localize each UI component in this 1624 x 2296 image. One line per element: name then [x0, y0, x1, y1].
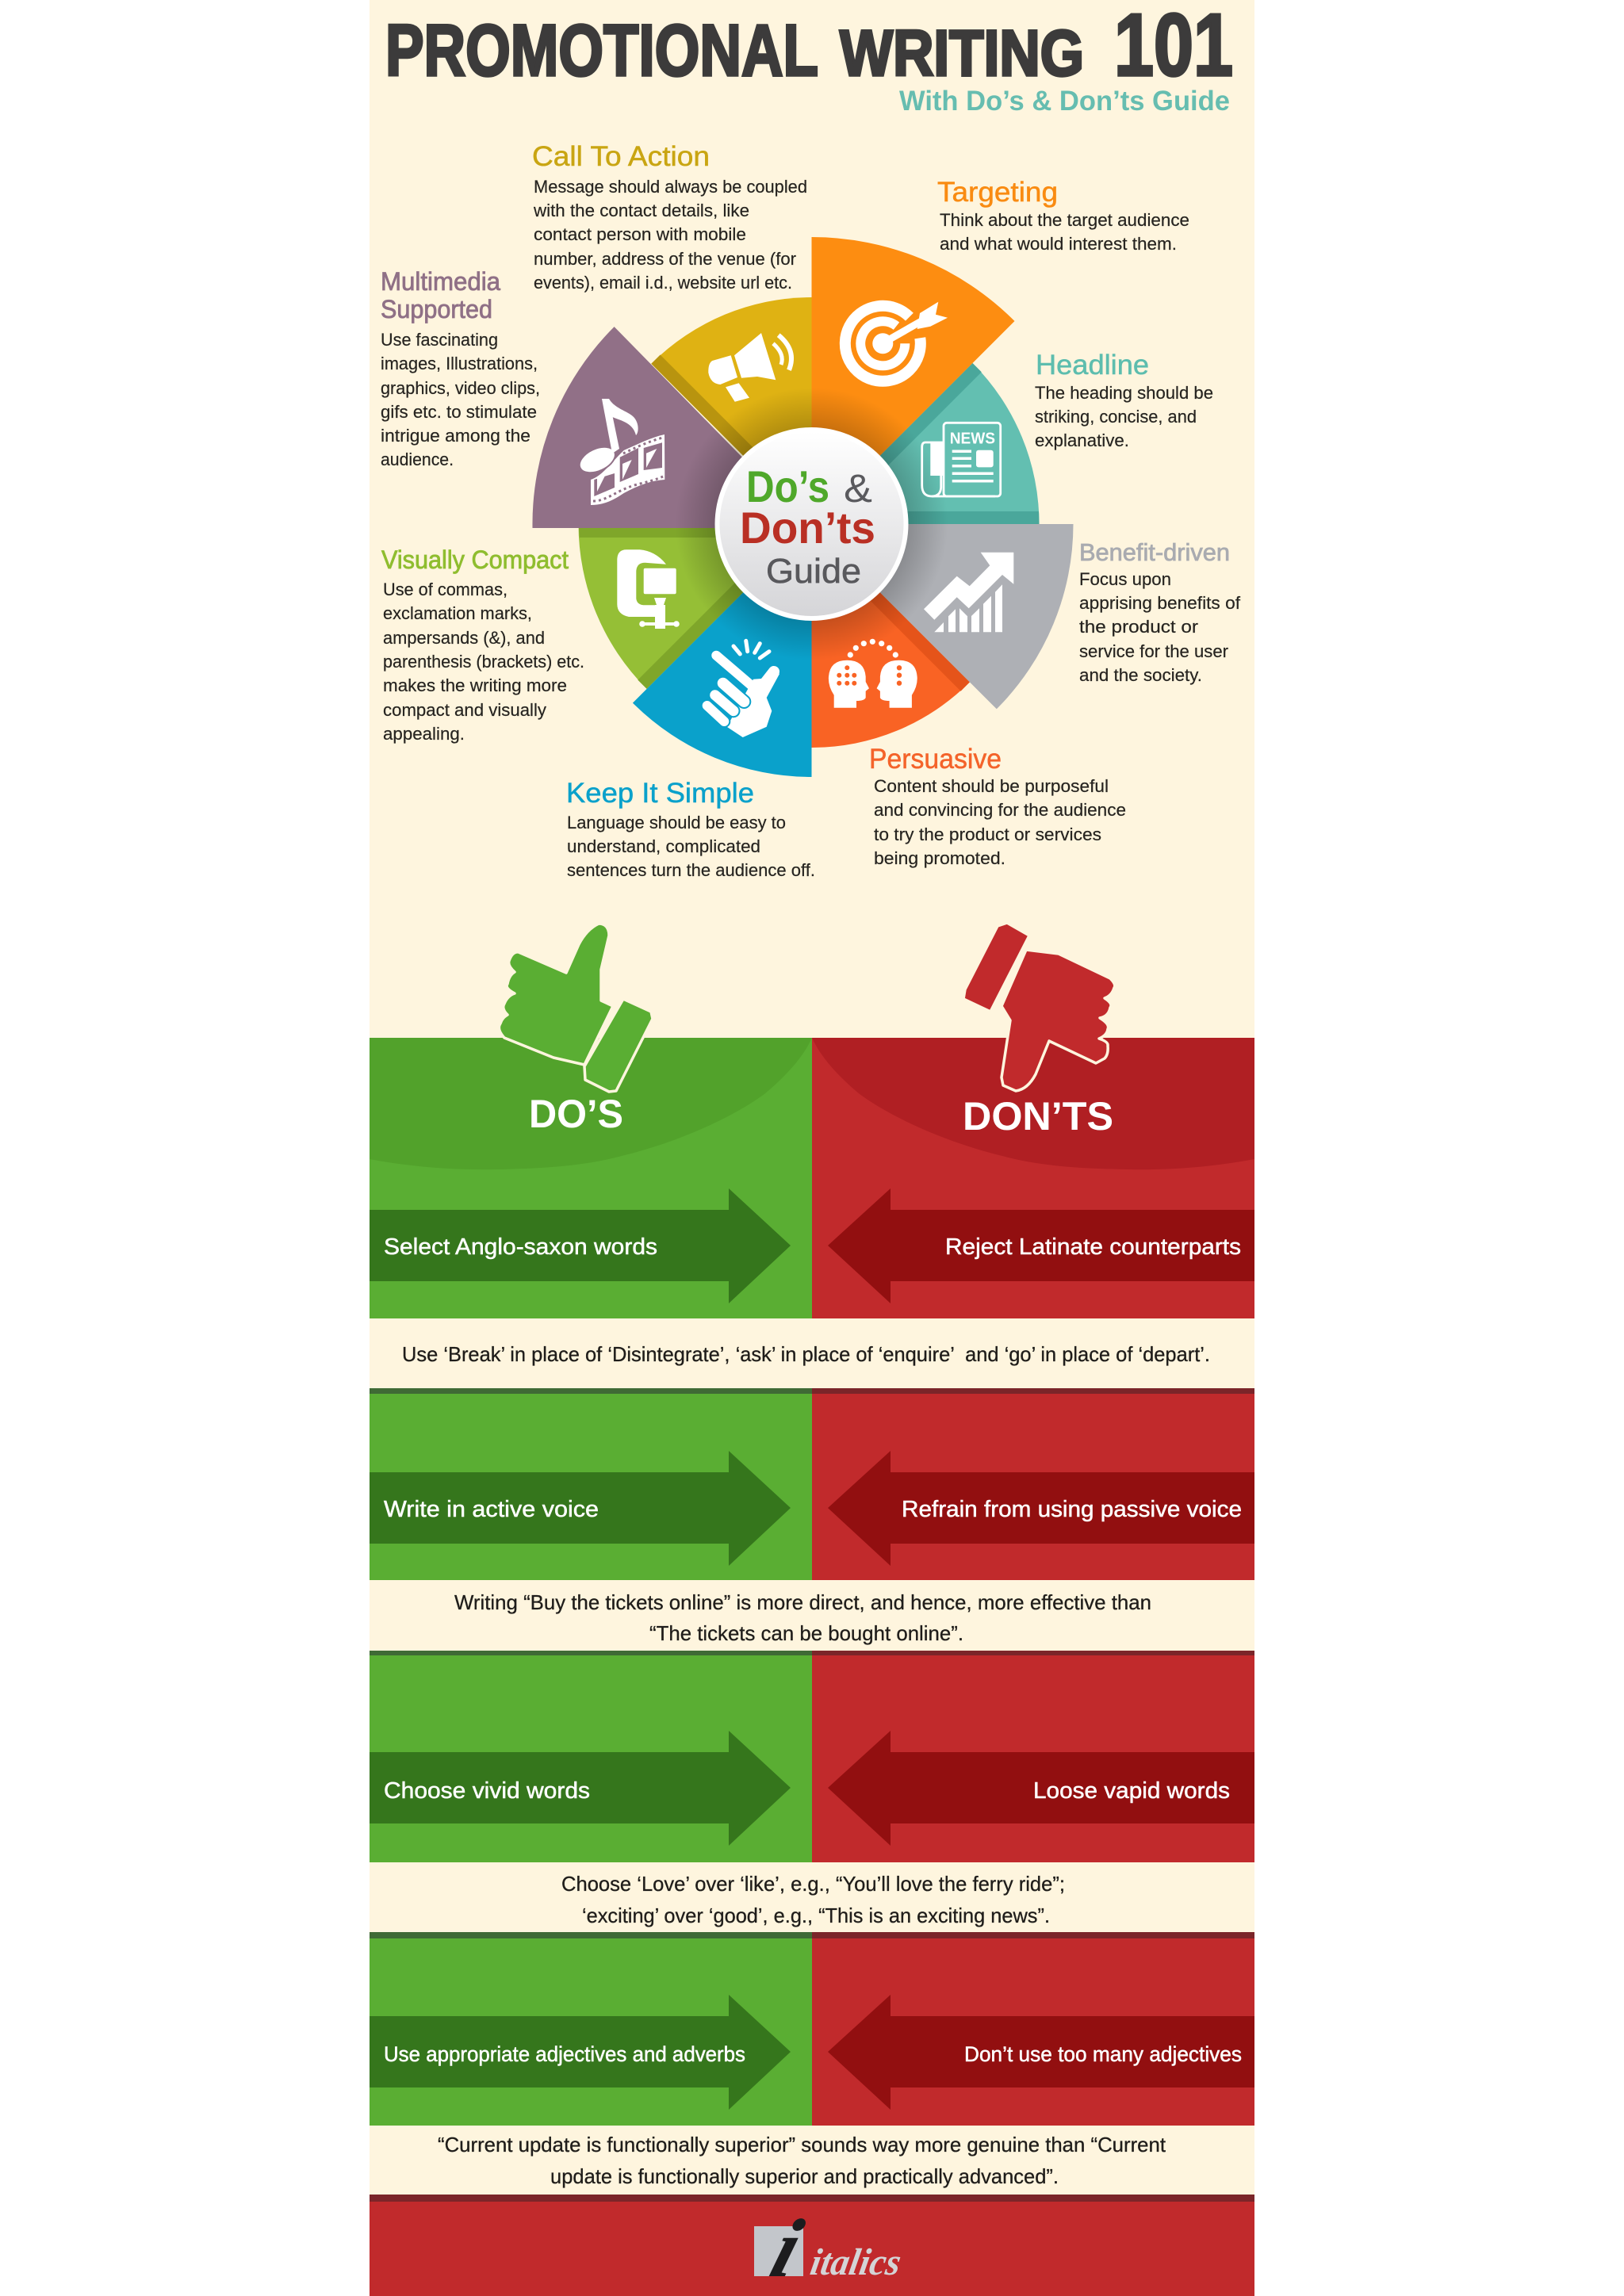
icon: thumbs down: [963, 923, 1115, 1091]
center disc: &: [844, 466, 872, 511]
text block: keep it simple: understand, complicated: [567, 836, 760, 856]
row 4: Use appropriate adjectives and adverbs: [384, 2042, 745, 2066]
row 2: [370, 1394, 1254, 1580]
text block: persuasive: Content should be purposeful: [874, 776, 1109, 796]
heading: don'ts: DON’TS: [963, 1094, 1113, 1138]
note strip 1: Use ‘Break’ in place of ‘Disintegrate’, ‘ask’ in place of ‘enquire’ and ‘go’ in place of ‘depart’.: [402, 1342, 1210, 1366]
text block: benefit-driven: service for the user: [1079, 641, 1228, 661]
text block: multimedia supported: Multimedia: [381, 267, 500, 296]
row 4: [370, 1938, 1254, 2126]
text block: call to action: number, address of the venue (for: [534, 249, 796, 269]
arrow: vapid words: [828, 1731, 1254, 1846]
text block: headline: striking, concise, and: [1035, 407, 1197, 427]
row 3: Loose vapid words: [1033, 1778, 1230, 1804]
header arc: don'ts: [812, 1038, 1254, 1169]
text block: targeting: [937, 177, 1189, 254]
text block: visually compact: parenthesis (brackets) etc.: [383, 652, 584, 672]
icon: snapping hand: [707, 641, 779, 737]
text block: multimedia supported: [381, 267, 540, 469]
arrow: select anglo-saxon: [370, 1188, 791, 1303]
text block: visually compact: exclamation marks,: [383, 603, 532, 623]
icon: music and film: [576, 399, 665, 505]
text block: headline: The heading should be: [1035, 383, 1213, 403]
center disc: Do’s: [746, 461, 829, 511]
text block: visually compact: Visually Compact: [381, 545, 569, 574]
text block: benefit-driven: and the society.: [1079, 665, 1202, 685]
row 1: do and don't bands: [370, 1038, 1254, 1318]
row 1: do and don't bands: Select Anglo-saxon words: [384, 1234, 657, 1260]
text block: call to action: with the contact details, like: [533, 201, 749, 220]
logo: italics: [754, 2202, 904, 2294]
arrow: too many adjectives: [828, 1995, 1254, 2110]
icon: target: [845, 302, 948, 381]
text block: call to action: events), email i.d., website url etc.: [534, 273, 792, 293]
text block: multimedia supported: images, Illustrations,: [381, 354, 538, 373]
text block: benefit-driven: Benefit-driven: [1079, 538, 1230, 566]
text block: keep it simple: [566, 778, 815, 880]
icon: newspaper: NEWS: [950, 429, 995, 447]
text block: multimedia supported: Supported: [381, 295, 492, 323]
wedge: benefit-driven: [812, 524, 1074, 709]
text block: multimedia supported: graphics, video clips,: [381, 378, 540, 398]
note strip 2: [370, 1590, 1254, 1655]
text block: call to action: contact person with mobile: [534, 224, 746, 244]
text block: headline: Headline: [1036, 350, 1149, 381]
icon: clamp: [617, 549, 680, 629]
center disc: Guide: [766, 552, 861, 591]
title: WRITING: [840, 17, 1084, 90]
text block: benefit-driven: apprising benefits of: [1079, 593, 1241, 613]
note strip 3: ‘exciting’ over ‘good’, e.g., “This is an exciting news”.: [582, 1904, 1050, 1927]
text block: multimedia supported: Use fascinating: [381, 330, 498, 350]
row 3: Choose vivid words: [384, 1778, 590, 1804]
heading: do's: DO’S: [529, 1092, 623, 1136]
arrow: passive voice: [828, 1451, 1254, 1566]
text block: persuasive: being promoted.: [874, 848, 1005, 868]
text block: keep it simple: sentences turn the audience off.: [567, 860, 815, 880]
text block: multimedia supported: gifs etc. to stimulate: [381, 402, 537, 422]
arrow: active voice: [370, 1451, 791, 1566]
pie wheel: [532, 237, 1074, 777]
text block: headline: [1035, 350, 1213, 450]
text block: targeting: Think about the target audience: [940, 210, 1189, 230]
note strip 3: [370, 1872, 1254, 1938]
text block: visually compact: makes the writing more: [383, 675, 567, 695]
title: PROMOTIONAL: [385, 10, 818, 91]
center disc: Don’ts: [740, 503, 875, 553]
row 4: Don’t use too many adjectives: [964, 2042, 1242, 2066]
text block: persuasive: and convincing for the audience: [874, 800, 1126, 820]
text block: benefit-driven: the product or: [1079, 617, 1199, 637]
row 3: [370, 1655, 1254, 1862]
icon: growth chart: [924, 553, 1013, 632]
wedge: multimedia: [532, 327, 812, 528]
note strip 4: update is functionally superior and practically advanced”.: [550, 2164, 1059, 2188]
note strip 4: [438, 2133, 1166, 2188]
text block: visually compact: appealing.: [383, 724, 465, 744]
row 2: Refrain from using passive voice: [902, 1497, 1242, 1522]
arrow: vivid words: [370, 1731, 791, 1846]
wedge: keep it simple: [633, 524, 812, 777]
text block: benefit-driven: [1079, 538, 1241, 685]
wedge: call to action: [651, 297, 821, 524]
text block: targeting: Targeting: [937, 177, 1058, 208]
text block: call to action: [532, 141, 807, 293]
note strip 2: Writing “Buy the tickets online” is more direct, and hence, more effective than: [454, 1590, 1151, 1614]
text block: persuasive: to try the product or services: [874, 825, 1101, 844]
wedge: persuasive: [802, 524, 970, 748]
row 1: do and don't bands: Reject Latinate counterparts: [945, 1234, 1241, 1260]
wedge: targeting: [812, 237, 1015, 524]
text block: keep it simple: Language should be easy to: [567, 813, 786, 832]
text block: persuasive: Persuasive: [869, 744, 1002, 775]
text block: call to action: Message should always be coupled: [534, 177, 807, 197]
logo: italics: italics: [807, 2241, 904, 2283]
text block: visually compact: [381, 545, 584, 744]
title: [385, 0, 1233, 94]
text block: visually compact: Use of commas,: [383, 580, 508, 599]
row 2: Write in active voice: [384, 1497, 599, 1522]
text block: headline: explanative.: [1035, 430, 1129, 450]
subtitle: With Do’s & Don’ts Guide: [899, 86, 1230, 117]
icon: megaphone: [708, 333, 791, 402]
note strip 2: “The tickets can be bought online”.: [649, 1621, 963, 1645]
text block: call to action: Call To Action: [532, 141, 710, 172]
text block: benefit-driven: Focus upon: [1079, 569, 1171, 589]
text block: multimedia supported: audience.: [381, 450, 454, 469]
text block: keep it simple: Keep It Simple: [566, 778, 754, 809]
text block: visually compact: compact and visually: [383, 700, 547, 720]
logo: italics: i: [761, 2202, 813, 2294]
text block: visually compact: ampersands (&), and: [383, 628, 545, 648]
arrow: adjectives and adverbs: [370, 1995, 791, 2110]
center disc: [715, 427, 909, 621]
text block: targeting: and what would interest them.: [940, 234, 1177, 254]
wedge: headline: [812, 363, 1039, 533]
icon: thumbs up: [499, 924, 653, 1092]
wedge: visually compact: [579, 515, 812, 689]
panel: cream background: [370, 0, 1254, 2296]
text block: multimedia supported: intrigue among the: [381, 426, 530, 446]
note strip 3: Choose ‘Love’ over ‘like’, e.g., “You’ll love the ferry ride”;: [561, 1872, 1065, 1896]
arrow: reject latinate: [828, 1188, 1254, 1303]
header arc: do's: [370, 1038, 812, 1169]
icon: newspaper: [922, 423, 1001, 496]
footer band: [370, 2195, 1254, 2296]
icon: two heads: [829, 639, 917, 708]
hub shadow: [676, 388, 948, 660]
note strip 1: [370, 1342, 1254, 1394]
note strip 4: “Current update is functionally superior” sounds way more genuine than “Current: [438, 2133, 1166, 2156]
text block: persuasive: [869, 744, 1126, 868]
